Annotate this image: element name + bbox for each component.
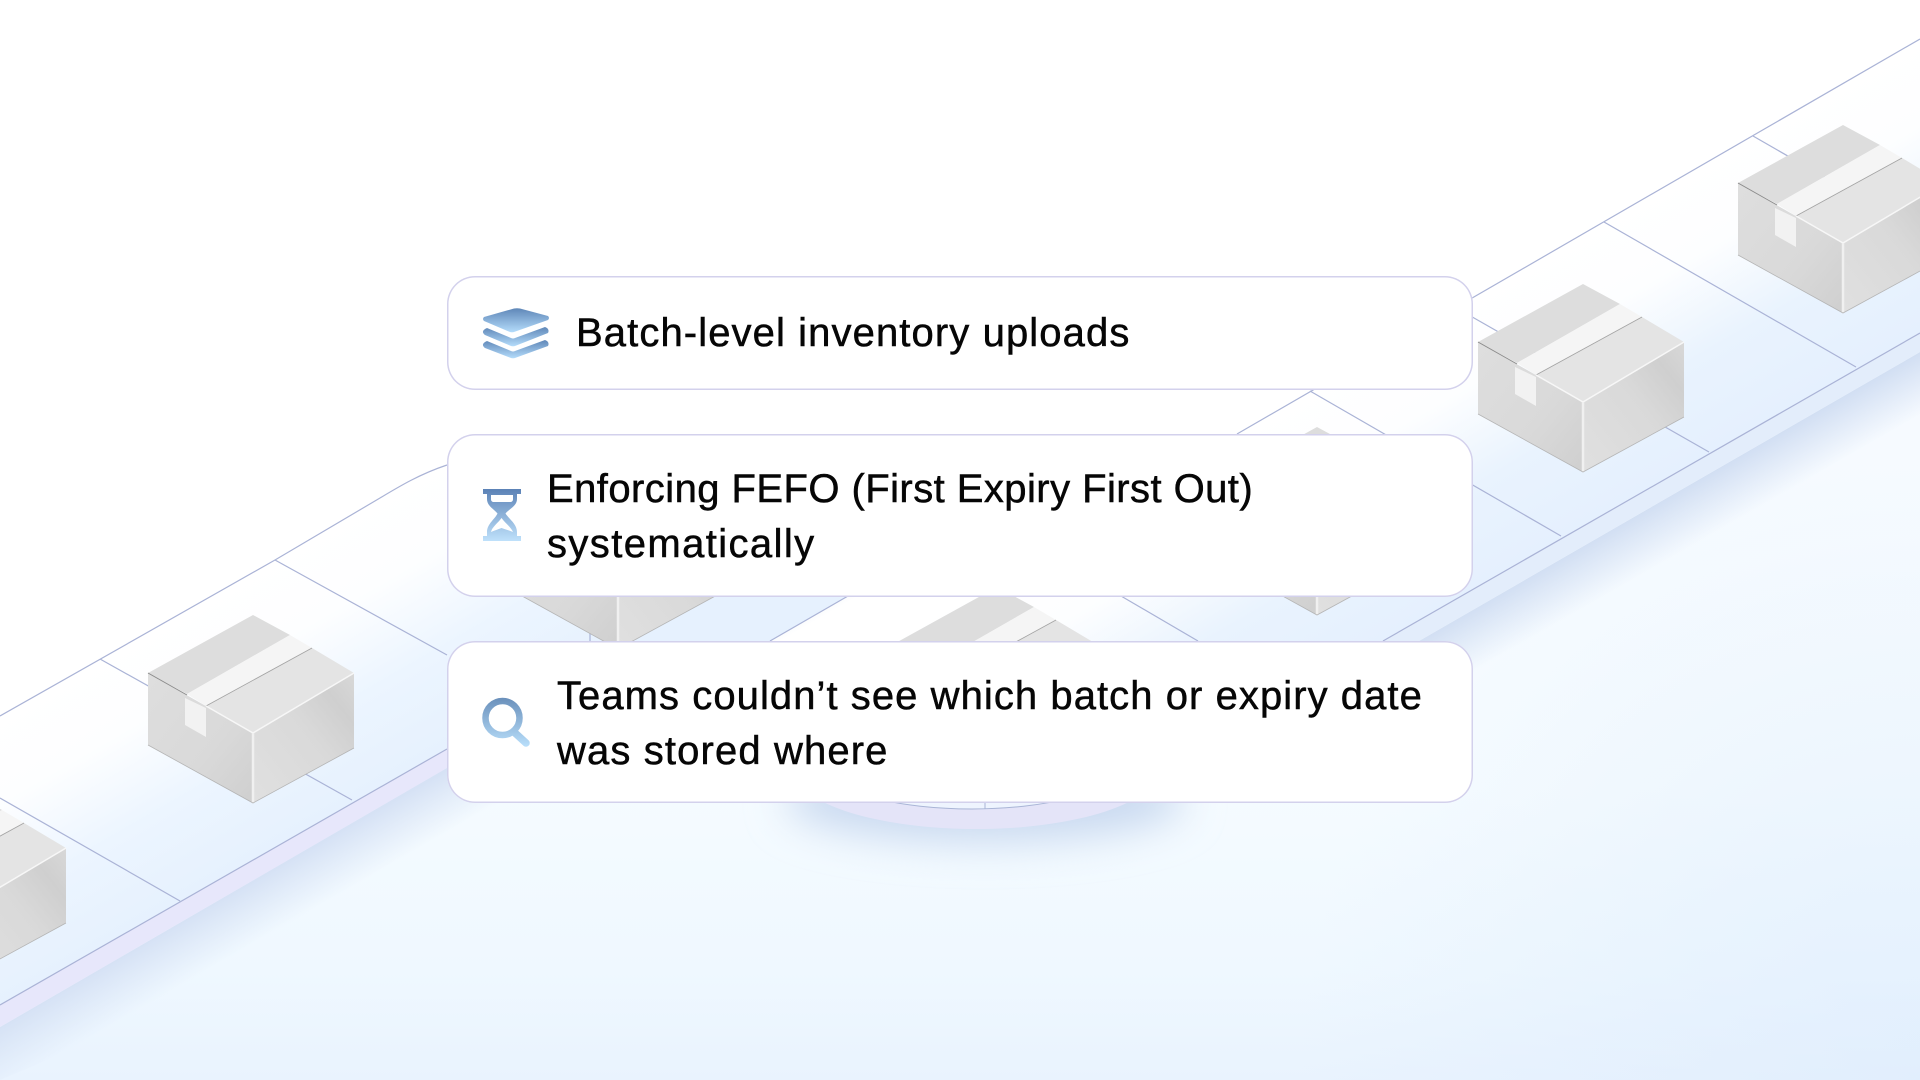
curve shadow below centre [785, 758, 1185, 842]
box: centre left, behind cards [513, 461, 719, 649]
box: centre, behind cards [892, 587, 1098, 775]
text: enforcing FEFO [547, 467, 1253, 566]
icon: magnifier [482, 698, 530, 747]
card: batch-level inventory uploads [447, 276, 1473, 390]
box: left [148, 615, 354, 803]
text: enforcing FEFO: systematically [547, 522, 816, 566]
conveyor belt: left section [0, 465, 900, 1005]
card: teams could not see batches [447, 641, 1473, 803]
box: far left [0, 790, 66, 978]
icon: stacked layers [482, 308, 549, 358]
conveyor belt: right section [800, 39, 1920, 700]
belt side band: right [1300, 333, 1920, 720]
box: right [1478, 284, 1684, 472]
floor corner tint [1300, 460, 1920, 1080]
floor below the belt [0, 352, 1920, 1080]
icon: hourglass [483, 489, 521, 541]
text: teams could not see [556, 674, 1423, 773]
text: enforcing FEFO: Enforcing FEFO (First Expiry First Out) [547, 467, 1253, 511]
curve lavender band below centre [794, 711, 1158, 829]
belt side band: left [0, 749, 447, 1027]
curve inner surface [832, 731, 1112, 809]
box: far right [1738, 125, 1920, 313]
card: enforcing FEFO [447, 434, 1473, 597]
text: batch-level inventory uploads: Batch-level inventory uploads [576, 311, 1130, 355]
belt shadow: right [1300, 352, 1920, 810]
belt shadow: left [0, 505, 900, 1080]
text: teams could not see: was stored where [557, 729, 889, 773]
box: centre right, behind cards [1212, 427, 1418, 615]
text: teams could not see: Teams couldn’t see which batch or expiry date [557, 674, 1423, 718]
